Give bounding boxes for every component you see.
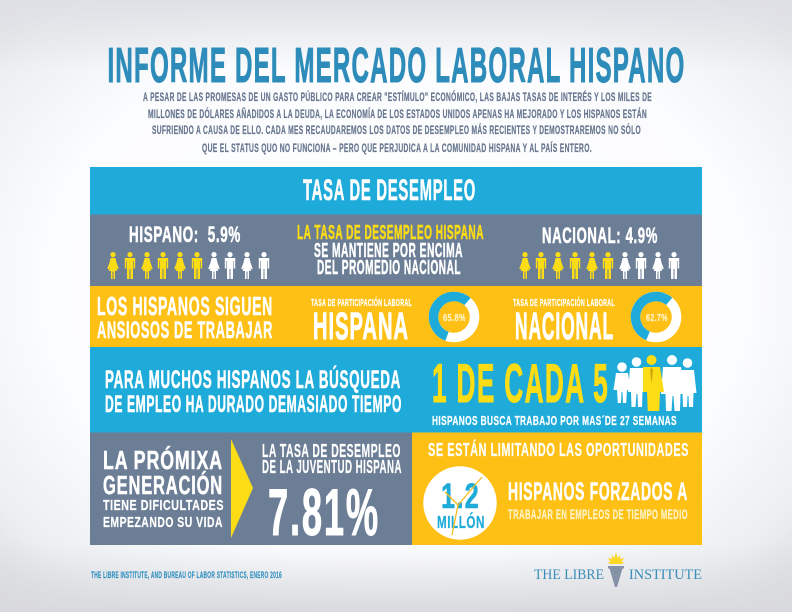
national participation label: TASA DE PARTICIPACIÓN LABORAL — [513, 296, 615, 309]
hispanic participation label: HISPANA — [313, 306, 409, 348]
donut chart: hispanic 65.8% — [433, 296, 474, 338]
arrow — [231, 439, 253, 538]
hispanic participation label — [311, 296, 412, 348]
national rate: NACIONAL: 4.9% — [542, 223, 658, 248]
icon: clock with 1.2 millon: 1.2 — [441, 477, 480, 516]
big stat: 7.81%: 7.81% — [268, 475, 380, 549]
participation headline: LOS HISPANOS SIGUEN — [97, 291, 273, 321]
next generation text: LA PRÓMIXA — [103, 445, 223, 475]
panel: long-term job search — [90, 347, 702, 432]
panel: next generation — [90, 432, 412, 549]
hispanic rate: HISPANO: 5.9% — [129, 222, 241, 247]
icon: group of five people — [614, 355, 696, 411]
logo: the libre institute: INSTITUTE — [629, 567, 702, 583]
next generation text: EMPEZANDO SU VIDA — [103, 514, 223, 531]
donut chart: national 62.7%: 62.7% — [646, 313, 668, 324]
job search headline: PARA MUCHOS HISPANOS LA BÚSQUEDA — [105, 364, 401, 394]
central statement: SE MANTIENE POR ENCIMA — [314, 240, 463, 262]
central statement: DEL PROMEDIO NACIONAL — [317, 257, 461, 279]
youth rate label: LA TASA DE DESEMPLEO — [262, 441, 401, 461]
intro paragraph — [143, 90, 652, 155]
panel: tasa de desempleo header — [90, 167, 702, 214]
panel: limited opportunities — [412, 432, 702, 545]
donut chart: national 62.7% — [636, 296, 676, 338]
panel: labor participation: NACIONAL — [515, 306, 614, 348]
next generation text: TIENE DIFICULTADES — [103, 497, 224, 514]
participation headline: ANSIOSOS DE TRABAJAR — [97, 317, 273, 344]
donut chart: hispanic 65.8%: 65.8% — [443, 313, 466, 324]
panel: long-term job search: 1 DE CADA 5 — [432, 352, 609, 414]
logo: the libre institute: THE LIBRE — [534, 567, 604, 583]
icon: clock with 1.2 millon — [423, 466, 497, 540]
youth rate label: DE LA JUVENTUD HISPANA — [262, 457, 402, 477]
panel: labor participation — [90, 286, 702, 348]
pictogram: hispanic ten people — [107, 252, 269, 279]
hispanic participation label: TASA DE PARTICIPACIÓN LABORAL — [311, 296, 412, 309]
youth rate label — [262, 441, 402, 477]
central statement — [297, 222, 484, 279]
participation headline — [97, 291, 273, 344]
icon: clock with 1.2 millon: MILLÓN — [437, 511, 485, 532]
national participation label — [513, 296, 615, 348]
job search headline: DE EMPLEO HA DURADO DEMASIADO TIEMPO — [105, 391, 402, 418]
logo: the libre institute — [534, 552, 702, 587]
panel: unemployment comparison — [90, 214, 702, 286]
source note: THE LIBRE INSTITUTE, AND BUREAU OF LABOR STATISTICS, ENERO 2016 — [91, 570, 282, 581]
pictogram: national ten people — [519, 252, 679, 279]
next generation text — [103, 445, 224, 531]
job search headline — [105, 364, 402, 418]
next generation text: GENERACIÓN — [103, 470, 223, 500]
central statement: LA TASA DE DESEMPLEO HISPANA — [297, 222, 484, 244]
panel: tasa de desempleo header: TASA DE DESEMPLEO — [303, 174, 476, 207]
